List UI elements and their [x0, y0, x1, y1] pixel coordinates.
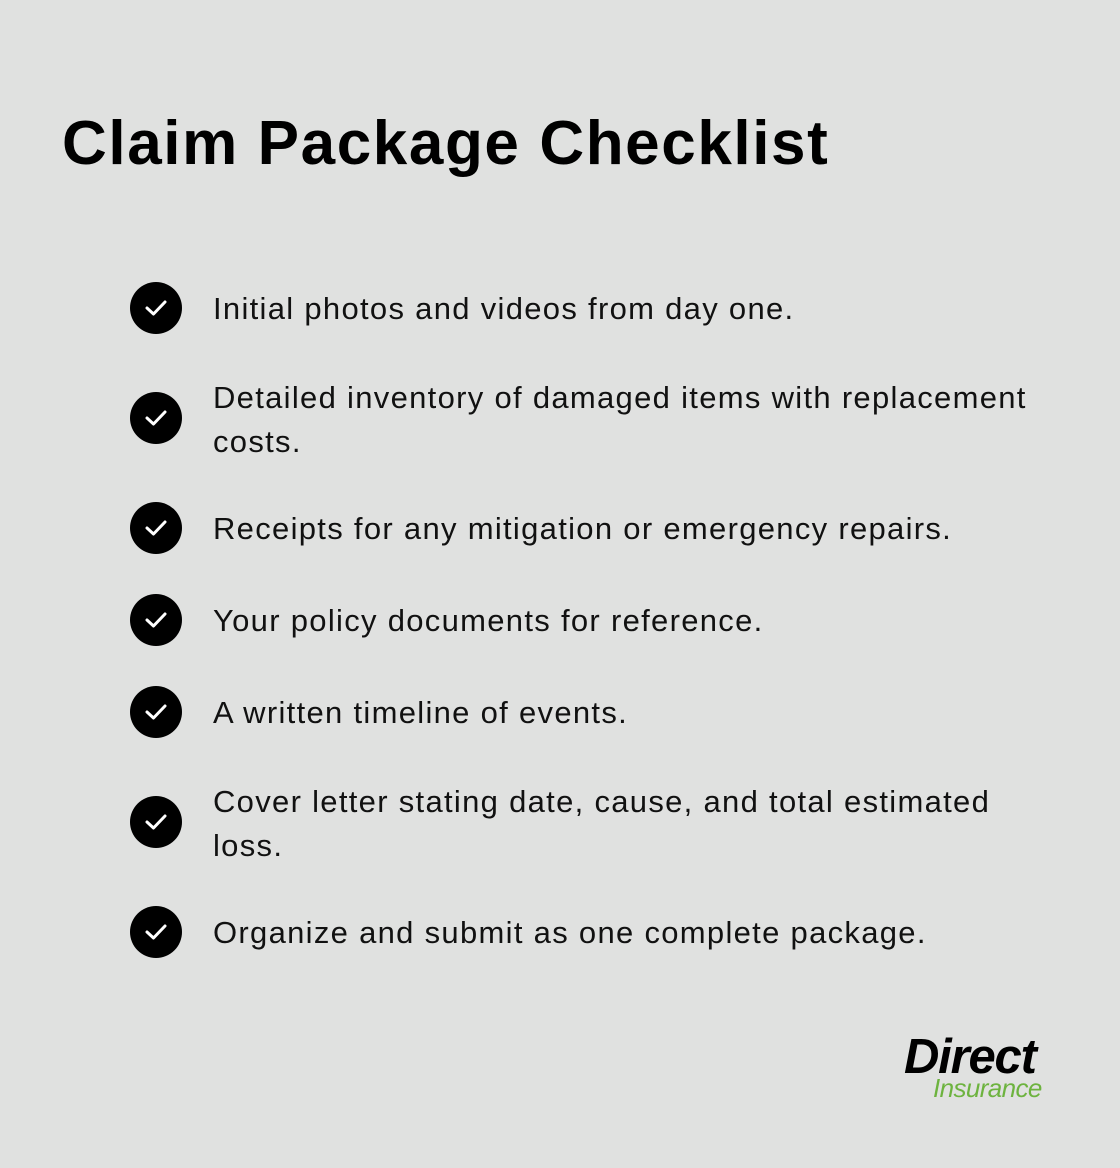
icon: check [130, 686, 182, 738]
text: Detailed inventory of damaged items with replacement costs. [213, 380, 1027, 459]
text: Initial photos and videos from day one. [213, 291, 794, 326]
icon: check [130, 502, 182, 554]
icon: check [130, 392, 182, 444]
logo: Insurance [933, 1073, 1042, 1103]
item 4 [130, 594, 764, 646]
title: Claim Package Checklist [62, 109, 829, 178]
icon: check [130, 282, 182, 334]
item 2 [130, 380, 1027, 459]
logo: Direct [904, 1030, 1036, 1084]
text: Your policy documents for reference. [213, 603, 764, 638]
icon: check [130, 594, 182, 646]
icon: check [130, 796, 182, 848]
item 7 [130, 906, 927, 958]
text: A written timeline of events. [213, 695, 628, 730]
item 5 [130, 686, 628, 738]
icon: check [130, 906, 182, 958]
item 3 [130, 502, 952, 554]
text: Cover letter stating date, cause, and total estimated loss. [213, 784, 990, 863]
text: Organize and submit as one complete package. [213, 915, 927, 950]
text: Receipts for any mitigation or emergency repairs. [213, 511, 952, 546]
item 1 [130, 282, 794, 334]
item 6 [130, 784, 990, 863]
